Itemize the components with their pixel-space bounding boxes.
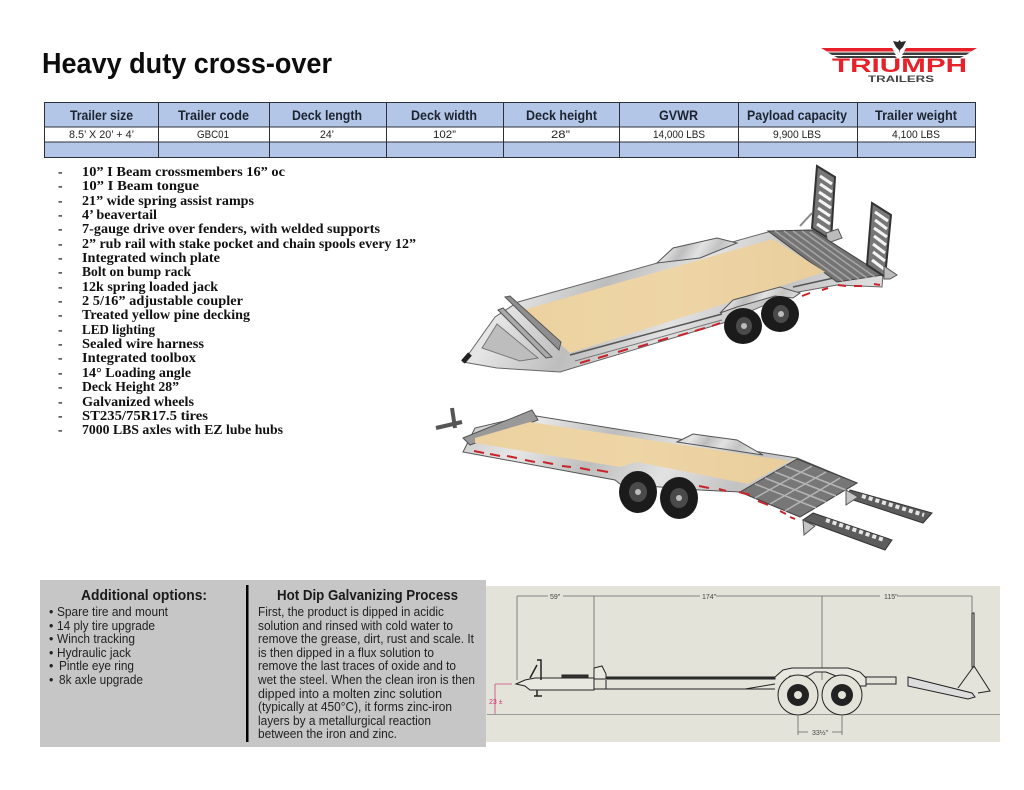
spec table: Payload capacity bbox=[747, 107, 847, 123]
dimension lines bbox=[517, 596, 972, 735]
trailer illustration: ramps raised view bbox=[463, 166, 897, 372]
feature list: - bbox=[58, 408, 62, 423]
wheels bbox=[724, 296, 799, 344]
feature list: - bbox=[58, 379, 62, 394]
feature list: - bbox=[58, 236, 62, 251]
height dimension bbox=[489, 684, 512, 714]
feature list: - bbox=[58, 422, 62, 437]
list: additional options: Pintle eye ring bbox=[59, 659, 134, 673]
list: additional options: • bbox=[49, 619, 53, 633]
feature list: - bbox=[58, 365, 62, 380]
feature list: - bbox=[58, 193, 62, 208]
feature list: Integrated toolbox bbox=[82, 350, 196, 365]
feature list: Deck Height 28” bbox=[82, 379, 179, 394]
feature list: - bbox=[58, 279, 62, 294]
feature list bbox=[58, 164, 416, 437]
ground line bbox=[487, 714, 1000, 716]
feature list: 4’ beavertail bbox=[82, 207, 157, 222]
feature list: - bbox=[58, 322, 62, 337]
text: galvanizing process: solution and rinsed with cold water to bbox=[258, 619, 453, 633]
text: galvanizing process bbox=[257, 605, 475, 741]
spec table: Trailer weight bbox=[875, 107, 957, 123]
spec table: GBC01 bbox=[197, 129, 229, 141]
tongue and frame bbox=[463, 230, 883, 372]
spec table: 28” bbox=[551, 129, 570, 141]
list: additional options: Hydraulic jack bbox=[57, 646, 132, 660]
feature list: - bbox=[58, 293, 62, 308]
text: galvanizing process: dipped into a molten zinc solution bbox=[258, 687, 442, 701]
list: additional options: • bbox=[49, 659, 53, 673]
list: additional options: • bbox=[49, 646, 53, 660]
text: galvanizing process: is then dipped in a flux solution to bbox=[258, 646, 434, 660]
spec table: 9,900 LBS bbox=[773, 129, 821, 141]
feature list: 7000 LBS axles with EZ lube hubs bbox=[82, 422, 283, 437]
text: galvanizing process: remove the grease, dirt, rust and scale. It bbox=[258, 632, 474, 646]
wheels bbox=[619, 471, 698, 519]
grid deck bbox=[740, 459, 857, 517]
red rail lights bbox=[580, 284, 880, 363]
list: additional options: • bbox=[49, 673, 53, 687]
text: galvanizing process: layers by a metallurgical reaction bbox=[258, 714, 431, 728]
spec table: 102” bbox=[433, 129, 456, 141]
feature list: - bbox=[58, 207, 62, 222]
feature list: Treated yellow pine decking bbox=[82, 307, 250, 322]
dimension drawing: 115" bbox=[884, 594, 898, 601]
height dimension: 23 ± bbox=[489, 699, 503, 706]
feature list: Sealed wire harness bbox=[82, 336, 204, 351]
spec table: 4,100 LBS bbox=[892, 129, 940, 141]
feature list: - bbox=[58, 178, 62, 193]
panel: options and galvanizing bbox=[40, 580, 486, 747]
feature list: - bbox=[58, 394, 62, 409]
spec table: Trailer code bbox=[178, 107, 249, 123]
feature list: Galvanized wheels bbox=[82, 394, 194, 409]
dimension drawing: 59" bbox=[550, 594, 561, 601]
text: galvanizing process: remove the last traces of oxide and to bbox=[258, 659, 456, 673]
frame bbox=[463, 415, 857, 517]
text: galvanizing process: First, the product is dipped in acidic bbox=[258, 605, 444, 619]
wheels bbox=[778, 675, 862, 715]
rear grid deck bbox=[768, 230, 883, 282]
logo: Triumph Trailers: TRAILERS bbox=[868, 74, 934, 85]
feature list: 10” I Beam crossmembers 16” oc bbox=[82, 164, 285, 179]
feature list: Bolt on bump rack bbox=[82, 264, 191, 279]
list: additional options: • bbox=[49, 605, 53, 619]
spec table: GVWR bbox=[659, 107, 698, 123]
near fender bbox=[720, 287, 800, 313]
list: additional options: Spare tire and mount bbox=[57, 605, 168, 619]
feature list: LED lighting bbox=[82, 322, 155, 337]
feature list: 2” rub rail with stake pocket and chain spools every 12” bbox=[82, 236, 416, 251]
spec table: 8.5’ X 20’ + 4’ bbox=[69, 129, 134, 141]
logo: Triumph Trailers bbox=[821, 40, 977, 85]
feature list: - bbox=[58, 307, 62, 322]
feature list: Integrated winch plate bbox=[82, 250, 220, 265]
spec table: Deck height bbox=[526, 107, 597, 123]
red rail lights bbox=[474, 451, 795, 519]
logo: Triumph Trailers: TRIUMPH bbox=[832, 56, 967, 77]
feature list: 7-gauge drive over fenders, with welded supports bbox=[82, 221, 380, 236]
spec table: Deck width bbox=[411, 107, 477, 123]
dimension drawing: 174" bbox=[702, 594, 717, 601]
dimension drawing bbox=[486, 586, 1000, 742]
spec table bbox=[44, 102, 976, 158]
list: additional options: • bbox=[49, 632, 53, 646]
wood deck bbox=[523, 239, 825, 353]
feature list: 14° Loading angle bbox=[82, 365, 191, 380]
feature list: - bbox=[58, 250, 62, 265]
feature list: - bbox=[58, 264, 62, 279]
spec table: Trailer size bbox=[70, 107, 133, 123]
near ramp bbox=[867, 203, 897, 279]
spec table: 24’ bbox=[320, 129, 334, 141]
coupler and jack bbox=[436, 408, 462, 428]
text: galvanizing process: between the iron and zinc. bbox=[258, 727, 397, 741]
list: additional options: Winch tracking bbox=[57, 632, 135, 646]
dimension drawing: 33½" bbox=[812, 729, 829, 737]
feature list: 21” wide spring assist ramps bbox=[82, 193, 254, 208]
feature list: 12k spring loaded jack bbox=[82, 279, 219, 294]
feature list: - bbox=[58, 221, 62, 236]
far ramp bbox=[800, 166, 842, 243]
heading: additional options: Additional options: bbox=[81, 587, 207, 604]
feature list: 2 5/16” adjustable coupler bbox=[82, 293, 243, 308]
side view trailer bbox=[516, 613, 990, 699]
bump rack bbox=[505, 296, 561, 350]
list: additional options: 8k axle upgrade bbox=[59, 673, 143, 687]
wood deck bbox=[475, 422, 790, 484]
list: additional options: 14 ply tire upgrade bbox=[57, 619, 155, 633]
feature list: - bbox=[58, 164, 62, 179]
icon: maple leaf crest bbox=[893, 40, 906, 53]
feature list: ST235/75R17.5 tires bbox=[82, 408, 208, 423]
spec table: 14,000 LBS bbox=[653, 129, 705, 141]
feature list: 10” I Beam tongue bbox=[82, 178, 199, 193]
list: additional options bbox=[49, 605, 168, 687]
feature list: - bbox=[58, 350, 62, 365]
spec table: Deck length bbox=[292, 107, 362, 123]
text: galvanizing process: (typically at 450°C), it forms zinc-iron bbox=[258, 700, 452, 714]
trailer illustration: ramps lowered view bbox=[436, 408, 932, 550]
text: galvanizing process: wet the steel. When the clean iron is then bbox=[257, 673, 475, 687]
feature list: - bbox=[58, 336, 62, 351]
divider bbox=[246, 585, 248, 742]
heading: galvanizing: Hot Dip Galvanizing Process bbox=[277, 587, 458, 604]
lowered ramps bbox=[803, 490, 932, 550]
title: Heavy duty cross-over bbox=[42, 48, 332, 80]
